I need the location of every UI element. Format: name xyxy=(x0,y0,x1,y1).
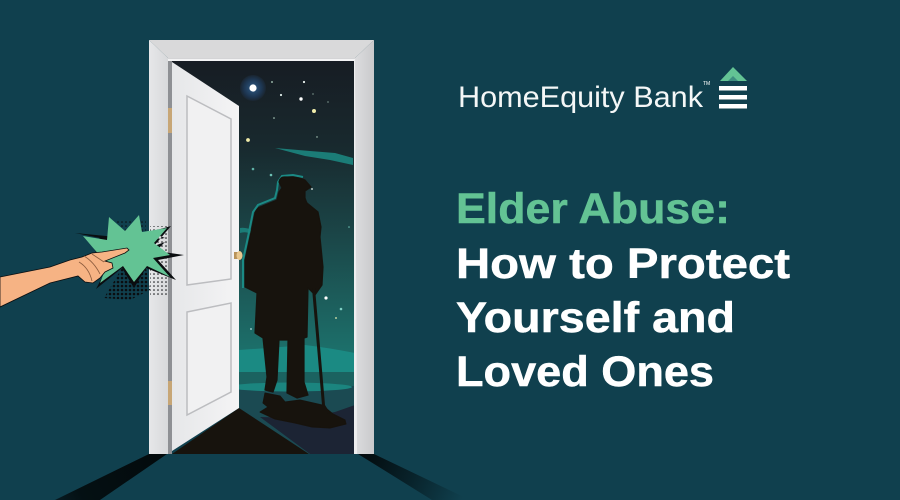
man's shadow on the ground xyxy=(260,393,346,428)
open white door xyxy=(172,62,242,451)
finger crease lines xyxy=(79,254,104,281)
dark floor wedge cast by door xyxy=(172,408,309,454)
floor shadows below door frame xyxy=(55,454,470,500)
door upper panel xyxy=(187,96,231,285)
title line: How to Protect: How to Protect xyxy=(456,240,790,288)
teal cloud streaks xyxy=(240,148,353,234)
starburst black shadow xyxy=(75,226,184,289)
title line: Yourself and: Yourself and xyxy=(456,294,735,342)
halftone dots xyxy=(104,220,168,300)
icon: house chevron and bars xyxy=(719,67,747,108)
hinges xyxy=(168,108,172,405)
stars xyxy=(246,81,350,330)
night scene through the doorway xyxy=(168,58,355,454)
title line: Elder Abuse: Elder Abuse: xyxy=(456,185,730,233)
logo: HomeEquity Bank xyxy=(458,67,747,114)
arm and pointing finger xyxy=(0,248,129,307)
title line: Loved Ones: Loved Ones xyxy=(456,348,714,396)
landscape bands xyxy=(228,345,355,454)
door frame xyxy=(149,40,374,454)
trademark: TM xyxy=(703,81,710,87)
door knob xyxy=(234,251,242,260)
starburst green xyxy=(83,215,170,283)
comic burst with pointing hand xyxy=(0,215,184,307)
silhouette of elderly man with cane xyxy=(243,175,330,414)
moon xyxy=(240,75,266,101)
title xyxy=(456,185,790,396)
door lower panel xyxy=(187,303,231,415)
logo wordmark: HomeEquity Bank xyxy=(458,81,704,114)
